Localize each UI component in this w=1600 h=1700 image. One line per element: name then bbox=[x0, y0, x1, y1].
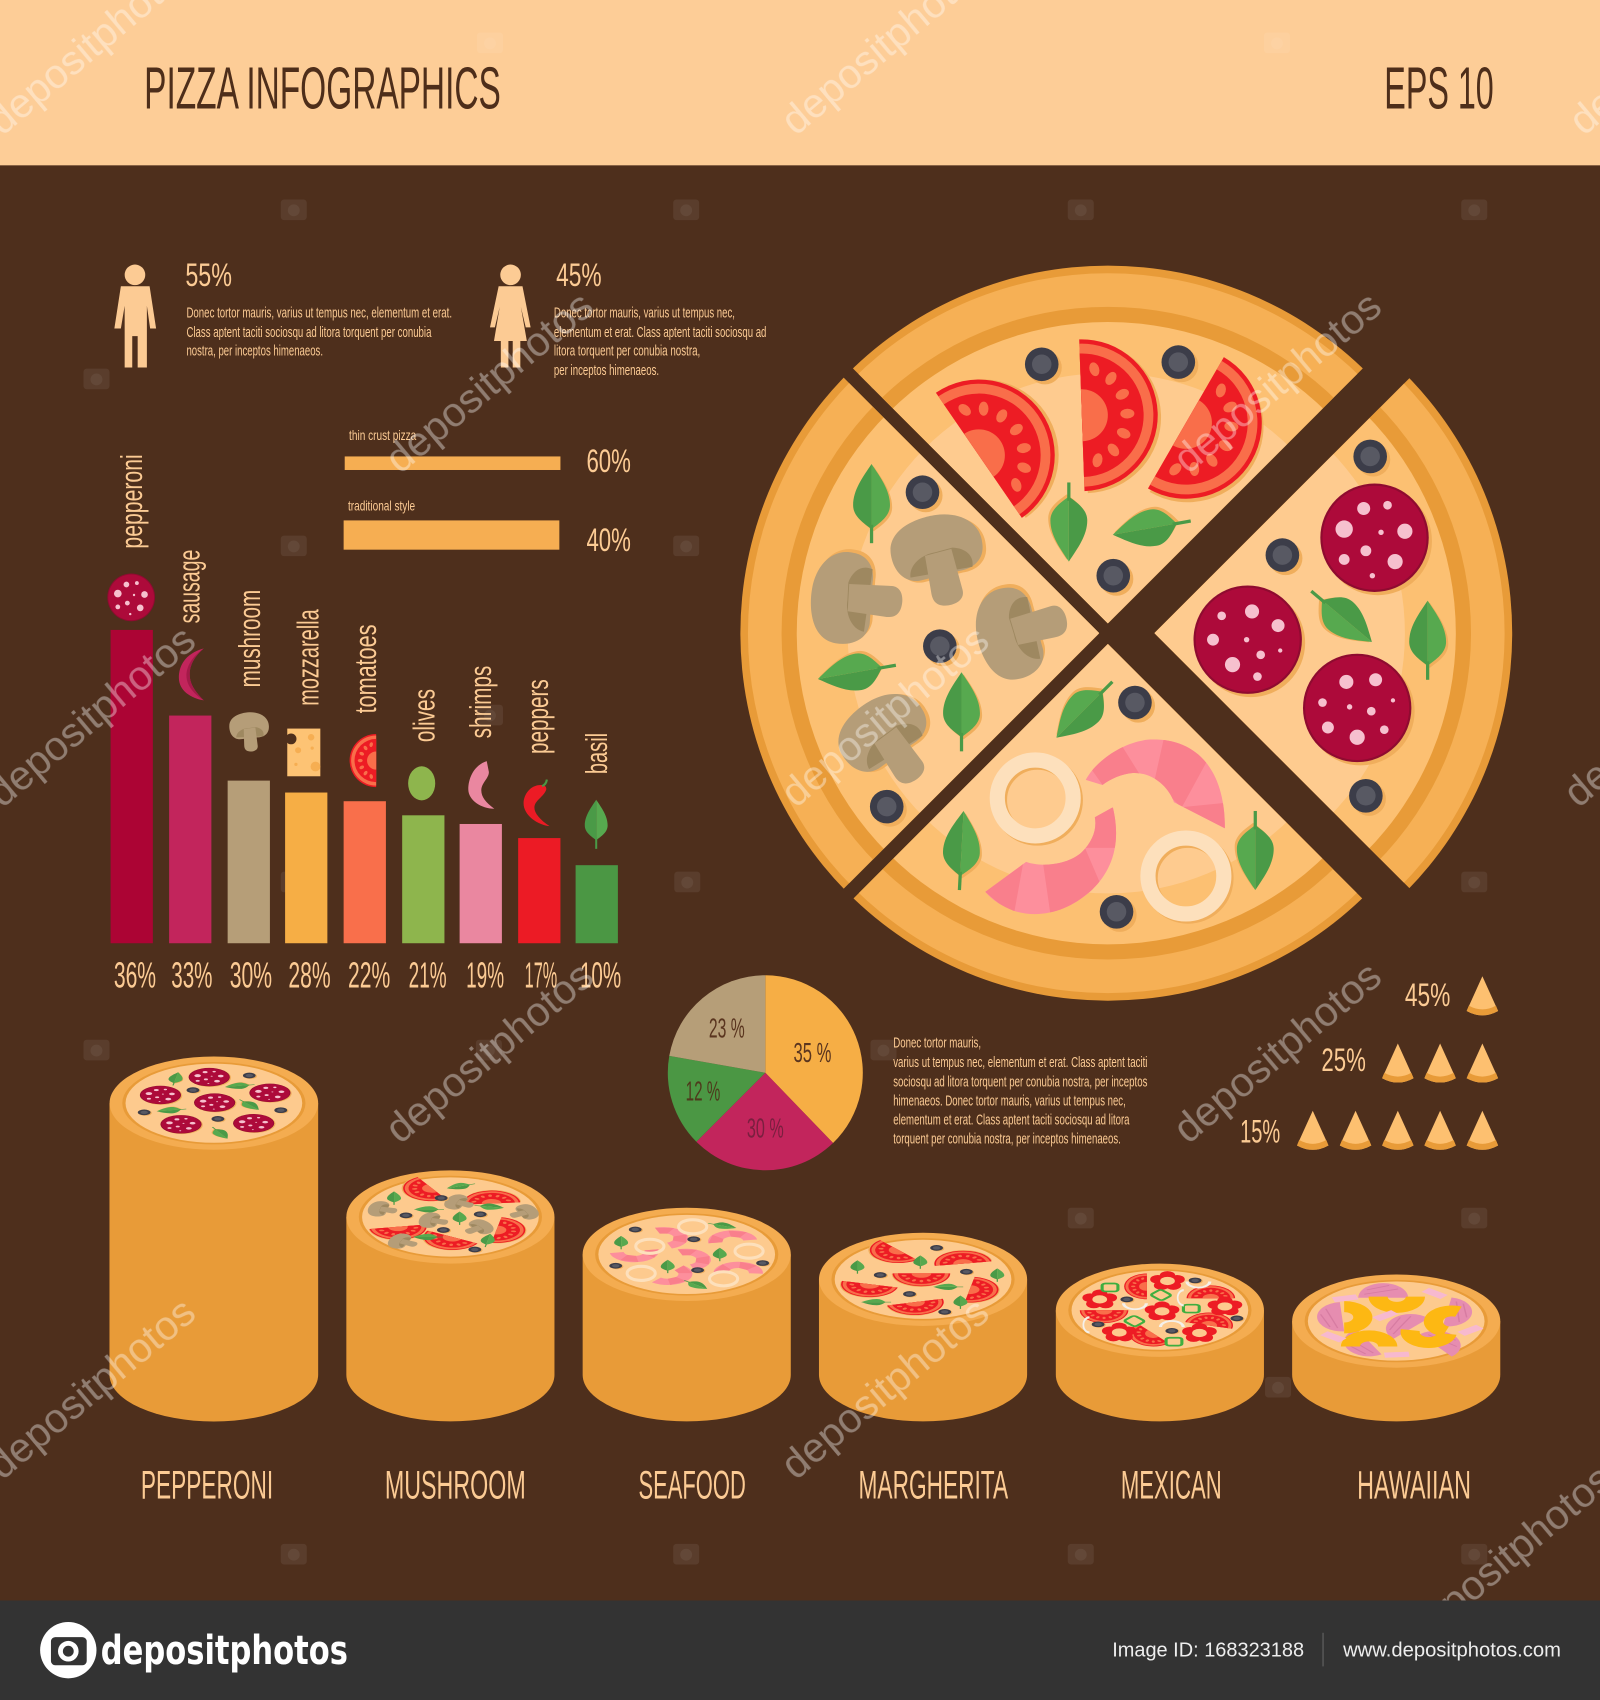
panel: crust style bars bbox=[344, 427, 631, 558]
topping percentages bbox=[114, 956, 621, 996]
female description bbox=[554, 305, 766, 379]
icon: mushroom bbox=[229, 712, 269, 751]
pizza type labels: SEAFOOD bbox=[638, 1463, 746, 1507]
topping labels: pepperoni bbox=[116, 454, 149, 549]
topping percentages: 17% bbox=[525, 956, 557, 996]
pizza type labels: MUSHROOM bbox=[385, 1463, 526, 1507]
icon: logo bbox=[40, 1622, 96, 1678]
pie chart description: torquent per conubia nostra, per inceptos himenaeos. bbox=[893, 1130, 1121, 1147]
watermarks: depositphotos bbox=[772, 1288, 997, 1488]
icon: pepperoni bbox=[107, 574, 155, 621]
panel: slices eaten pictogram bbox=[1240, 976, 1498, 1150]
panel: gender split bbox=[114, 257, 766, 379]
icon: chili pepper bbox=[524, 780, 550, 826]
traditional label: traditional style bbox=[348, 498, 415, 514]
slice: tomato bbox=[853, 266, 1363, 624]
logo wordmark: depositphotos bbox=[101, 1628, 348, 1674]
topping labels: mozzarella bbox=[293, 609, 326, 706]
icon: mozzarella bbox=[286, 729, 320, 776]
topping percentages: 36% bbox=[114, 956, 156, 996]
female description: elementum et erat. Class aptent taciti sociosqu ad bbox=[554, 324, 766, 341]
topping percentages: 33% bbox=[171, 956, 212, 996]
pizza type labels: MARGHERITA bbox=[859, 1463, 1008, 1507]
panel: slices eaten pictogram: 15% bbox=[1240, 1114, 1280, 1150]
topping labels: mushroom bbox=[234, 590, 267, 687]
pie chart description: varius ut tempus nec, elementum et erat. Class aptent taciti bbox=[893, 1054, 1147, 1071]
icon: olive bbox=[408, 766, 435, 800]
pie chart description: elementum et erat. Class aptent taciti sociosqu ad litora bbox=[893, 1111, 1130, 1128]
topping labels: shrimps bbox=[465, 666, 498, 738]
icon: basil bbox=[585, 800, 608, 849]
slice: seafood bbox=[854, 644, 1362, 1001]
icon: man bbox=[114, 265, 156, 368]
image id: Image ID: 168323188 bbox=[1112, 1639, 1304, 1662]
watermarks: depositphotos bbox=[376, 952, 602, 1152]
shrimp upper bbox=[1086, 740, 1225, 828]
pie chart bbox=[668, 975, 863, 1170]
pizza type labels: MEXICAN bbox=[1121, 1463, 1222, 1507]
topping labels: sausage bbox=[173, 550, 206, 623]
cylinder: pepperoni bbox=[109, 1057, 318, 1421]
slice: pepperoni bbox=[1154, 378, 1512, 888]
icon: sausage bbox=[179, 648, 204, 700]
topping percentages: 28% bbox=[288, 956, 331, 996]
male description: nostra, per inceptos himenaeos. bbox=[186, 343, 323, 360]
watermarks: depositphotos bbox=[1164, 282, 1390, 482]
male percentage: 55% bbox=[185, 257, 232, 293]
pie chart description bbox=[893, 1034, 1148, 1147]
watermarks: depositphotos bbox=[376, 282, 602, 482]
topping percentages: 19% bbox=[466, 956, 504, 996]
pie chart: 35 % bbox=[793, 1036, 831, 1068]
cylinder: margherita bbox=[819, 1233, 1027, 1421]
female description: Donec tortor mauris, varius ut tempus nec, bbox=[554, 305, 735, 322]
male description: Donec tortor mauris, varius ut tempus nec, elementum et erat. bbox=[186, 305, 452, 322]
header band bbox=[0, 0, 1600, 165]
topping labels: tomatoes bbox=[350, 624, 383, 713]
cylinder: seafood bbox=[583, 1208, 791, 1421]
pie chart: 23 % bbox=[709, 1012, 745, 1044]
footer bar bbox=[0, 1600, 1600, 1700]
slice: mushroom bbox=[740, 378, 1100, 889]
topping percentages: 22% bbox=[348, 956, 390, 996]
panel: slices eaten pictogram: 25% bbox=[1321, 1042, 1366, 1078]
pie chart description: Donec tortor mauris, bbox=[893, 1034, 981, 1051]
pizza type labels: PEPPERONI bbox=[141, 1463, 273, 1507]
website: www.depositphotos.com bbox=[1342, 1639, 1561, 1662]
traditional bar bbox=[344, 520, 559, 550]
EPS label: EPS 10 bbox=[1384, 54, 1494, 121]
watermarks: depositphotos bbox=[1164, 952, 1390, 1152]
female description: per inceptos himenaeos. bbox=[554, 362, 659, 379]
icon: woman bbox=[490, 265, 531, 368]
topping labels: olives bbox=[408, 689, 441, 742]
pie chart description: himenaeos. Donec tortor mauris, varius ut tempus nec, bbox=[893, 1092, 1126, 1109]
bar chart: toppings bbox=[111, 630, 618, 943]
pie chart: 12 % bbox=[686, 1074, 720, 1106]
thin crust bar bbox=[345, 456, 560, 470]
cylinder: hawaiian bbox=[1292, 1274, 1500, 1421]
pie chart: 30 % bbox=[747, 1111, 784, 1143]
topping labels bbox=[116, 454, 614, 774]
topping percentages: 21% bbox=[409, 956, 447, 996]
pizza type labels: HAWAIIAN bbox=[1357, 1463, 1471, 1507]
male description: Class aptent taciti sociosqu ad litora torquent per conubia bbox=[186, 324, 432, 341]
watermarks: depositphotos bbox=[772, 616, 997, 816]
topping percentages: 30% bbox=[230, 956, 272, 996]
male description bbox=[186, 305, 452, 360]
topping labels: peppers bbox=[522, 679, 555, 754]
thin crust label: thin crust pizza bbox=[349, 427, 416, 443]
topping labels: basil bbox=[581, 733, 614, 774]
shrimp lower bbox=[985, 807, 1116, 914]
pizza type labels bbox=[141, 1463, 1471, 1507]
title: PIZZA INFOGRAPHICS bbox=[144, 54, 501, 121]
pie chart description: sociosqu ad litora torquent per conubia nostra, per inceptos bbox=[893, 1073, 1148, 1090]
cylinder: mexican bbox=[1056, 1264, 1264, 1421]
panel: slices eaten pictogram: 45% bbox=[1405, 977, 1450, 1013]
female percentage: 45% bbox=[556, 257, 602, 293]
cylinder: mushroom bbox=[346, 1170, 554, 1421]
icon: tomato bbox=[350, 734, 376, 787]
female description: litora torquent per conubia nostra, bbox=[554, 343, 700, 360]
thin crust value: 60% bbox=[586, 443, 631, 479]
main pizza illustration bbox=[740, 266, 1512, 1001]
topping percentages: 10% bbox=[580, 956, 621, 996]
traditional value: 40% bbox=[586, 522, 631, 558]
icon: shrimp bbox=[468, 761, 494, 809]
